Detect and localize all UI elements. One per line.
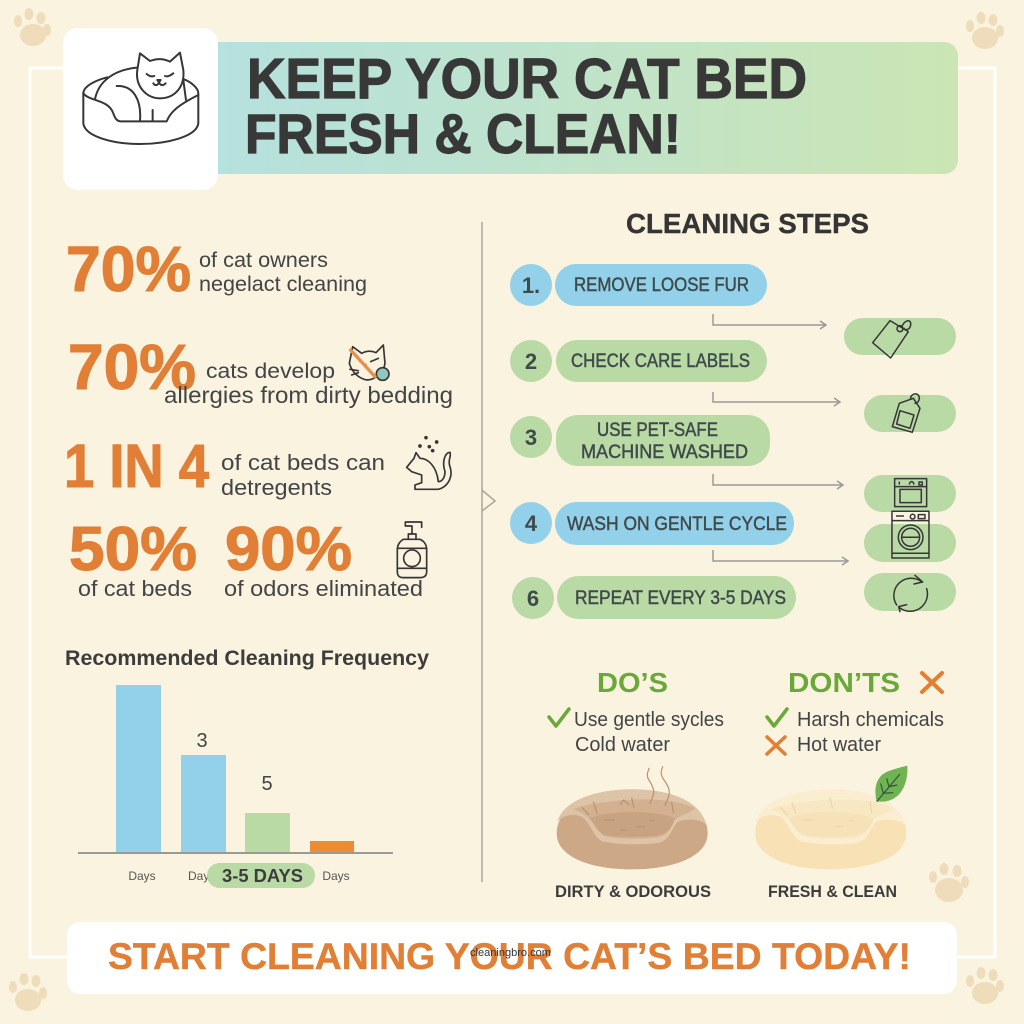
stat: 70% neglect cleaning: negelact cleaning (199, 273, 367, 296)
title: FRESH & CLEAN! (245, 102, 681, 165)
bar chart: recommended cleaning frequency (78, 685, 393, 888)
step 6: 6 (527, 586, 539, 611)
icon pill: oven (864, 475, 956, 512)
icon pill: repeat (864, 573, 956, 612)
call to action banner (67, 922, 957, 994)
step 6: REPEAT EVERY 3-5 DAYS (575, 588, 786, 609)
label: dirty and odorous: DIRTY & ODOROUS (555, 882, 711, 901)
stat: 1 in 4 (64, 432, 385, 500)
bar chart: recommended cleaning frequency: Days (188, 869, 215, 883)
logo card (63, 28, 218, 190)
stat: 70% allergies: cats develop (206, 360, 335, 383)
stat: 90% odors eliminated: of odors eliminated (224, 576, 423, 601)
stat: 1 in 4: detregents (221, 475, 332, 500)
don'ts column: Harsh chemicals (797, 709, 944, 731)
step 3 (510, 415, 770, 466)
bar chart: recommended cleaning frequency: 3 (196, 730, 208, 752)
step 3: MACHINE WASHED (581, 442, 748, 463)
step 4: WASH ON GENTLE CYCLE (567, 514, 787, 535)
step 3: USE PET-SAFE (597, 420, 718, 441)
stat: 70% neglect cleaning (66, 233, 367, 305)
don'ts column (767, 667, 944, 756)
label: fresh and clean: FRESH & CLEAN (768, 882, 897, 901)
stat: 70% allergies (68, 331, 453, 408)
don'ts column: DON’TS (788, 667, 900, 698)
stat: 70% neglect cleaning: of cat owners (199, 249, 328, 272)
stat: 70% allergies: 70% (68, 331, 196, 403)
chart heading: Recommended Cleaning Frequency (65, 647, 429, 670)
icon pill: detergent (864, 394, 956, 432)
paw: top left (14, 8, 51, 46)
icon: cat in bed (83, 53, 198, 144)
icon: leaf (875, 766, 907, 802)
stat: 90% odors eliminated (224, 515, 423, 601)
divider (482, 222, 495, 882)
pill: 3-5 days: 3-5 DAYS (222, 866, 303, 886)
icon pill: care tag (844, 318, 956, 358)
stat: 90% odors eliminated: 90% (225, 515, 352, 584)
bar chart: recommended cleaning frequency: Days (322, 869, 350, 883)
step 2: 2 (525, 349, 537, 374)
paw: lower right (929, 863, 969, 902)
step 2 (510, 340, 767, 382)
do's column: DO’S (597, 667, 668, 698)
step 4: 4 (525, 511, 538, 536)
step 4 (510, 502, 794, 545)
arrow: step 4 to washer (713, 550, 848, 565)
paw: bottom right (966, 967, 1004, 1004)
pill: 3-5 days (207, 863, 315, 888)
icon: allergic cat (349, 345, 389, 380)
icon: scratching cat (407, 437, 451, 489)
stat: 70% allergies: allergies from dirty bedding (164, 382, 453, 408)
title (245, 47, 807, 165)
step 1: REMOVE LOOSE FUR (574, 275, 749, 296)
stat: 1 in 4: 1 IN 4 (64, 432, 209, 500)
stat: 50% of cat beds: 50% (69, 515, 197, 584)
title: KEEP YOUR CAT BED (247, 47, 807, 111)
icon: check (767, 709, 787, 726)
icon: shampoo bottle (397, 522, 427, 578)
bar chart: recommended cleaning frequency: 5 (261, 773, 273, 795)
stat: 50% of cat beds: of cat beds (78, 576, 192, 601)
title banner (218, 42, 958, 174)
bar chart: recommended cleaning frequency: Days (128, 869, 156, 883)
icon: check (549, 709, 569, 726)
step 6 (512, 576, 796, 619)
icon pill: washing machine (864, 511, 956, 562)
step 3: 3 (525, 425, 537, 450)
step 1 (510, 264, 767, 306)
arrow: step 2 to detergent (713, 392, 840, 406)
step 2: CHECK CARE LABELS (571, 351, 750, 372)
paw: bottom left (9, 973, 47, 1011)
watermark: cleaningbro.com (470, 947, 551, 959)
arrow: step 1 to tag (713, 314, 826, 329)
icon: cross (767, 737, 785, 754)
heading: cleaning steps: CLEANING STEPS (626, 208, 869, 239)
stat: 1 in 4: of cat beds can (221, 450, 385, 475)
do's column (549, 667, 724, 756)
dirty bed (557, 767, 708, 869)
icon: cross (922, 673, 942, 692)
step 1: 1. (522, 273, 540, 298)
arrow: step 3 to oven (713, 474, 843, 489)
clean bed (755, 789, 906, 869)
call to action banner: START CLEANING YOUR CAT’S BED TODAY! (108, 936, 911, 977)
don'ts column: Hot water (797, 734, 881, 756)
do's column: Use gentle sycles (574, 709, 724, 731)
paw: top right (966, 12, 1004, 49)
do's column: Cold water (575, 734, 670, 756)
stat: 70% neglect cleaning: 70% (66, 233, 191, 305)
